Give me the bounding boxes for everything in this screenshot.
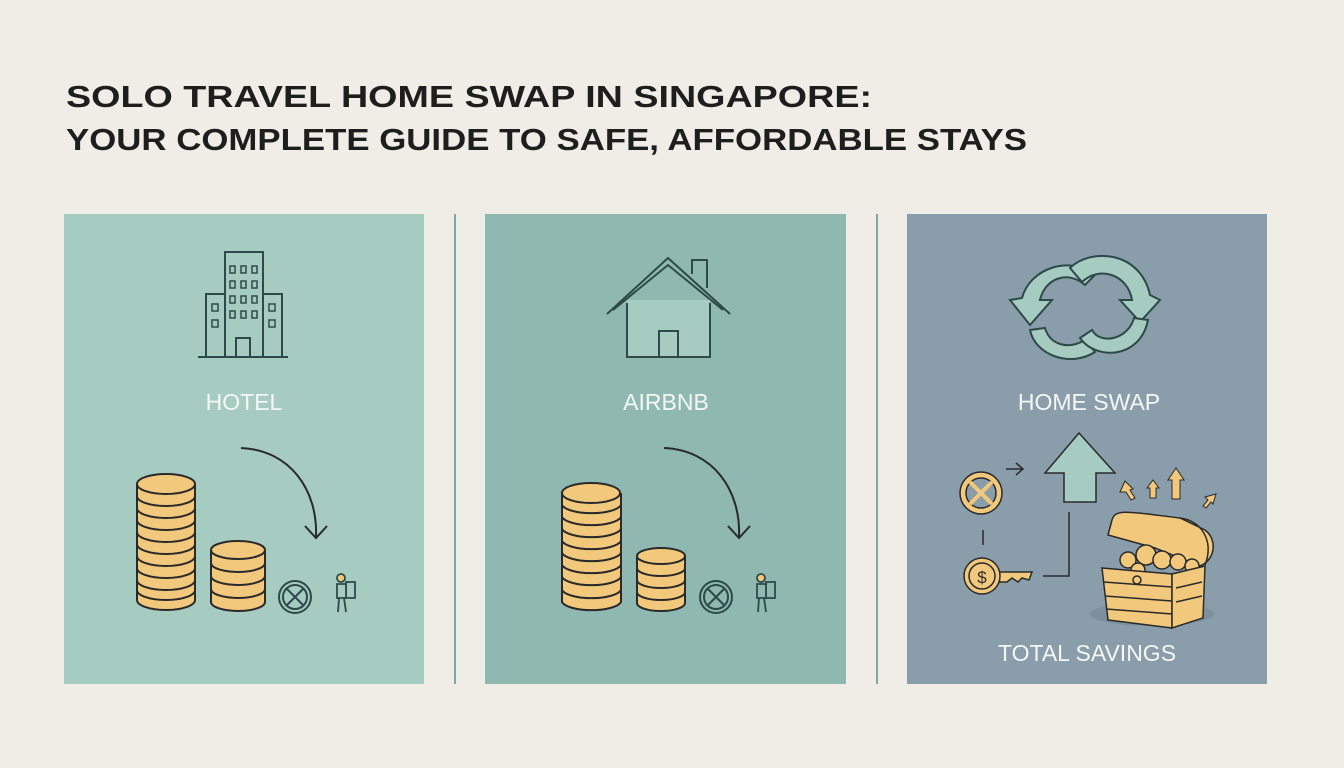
title <box>66 79 1027 157</box>
label: home swap: HOME SWAP <box>1018 389 1160 415</box>
icon: no sign <box>700 581 732 613</box>
icon: dollar key <box>964 558 1032 594</box>
chart: coin stacks airbnb <box>562 483 685 611</box>
label: airbnb: AIRBNB <box>623 389 709 415</box>
label: hotel: HOTEL <box>206 389 283 415</box>
arrow: big up <box>1045 433 1115 502</box>
icon: dollar key: $ <box>977 568 987 587</box>
icon: hotel building <box>198 252 288 357</box>
panel: airbnb <box>485 214 846 684</box>
title: YOUR COMPLETE GUIDE TO SAFE, AFFORDABLE STAYS <box>66 122 1027 157</box>
title: SOLO TRAVEL HOME SWAP IN SINGAPORE: <box>66 79 872 114</box>
icon: house <box>607 258 730 357</box>
icon: swap arrows <box>1010 256 1160 359</box>
icon: traveler <box>757 574 775 612</box>
arrow: small right <box>1006 463 1023 475</box>
label: total savings: TOTAL SAVINGS <box>998 640 1176 666</box>
icon: small up arrows <box>1120 468 1216 508</box>
icon: traveler <box>337 574 355 612</box>
icon: no wrench sign <box>960 472 1002 514</box>
panel: hotel <box>64 214 424 684</box>
icon: no sign <box>279 581 311 613</box>
arrow: curved down <box>241 448 327 538</box>
panel: home swap <box>907 214 1267 684</box>
icon: treasure chest <box>1090 512 1214 628</box>
chart: coin stacks hotel <box>137 474 265 611</box>
arrow: curved down <box>664 448 750 538</box>
